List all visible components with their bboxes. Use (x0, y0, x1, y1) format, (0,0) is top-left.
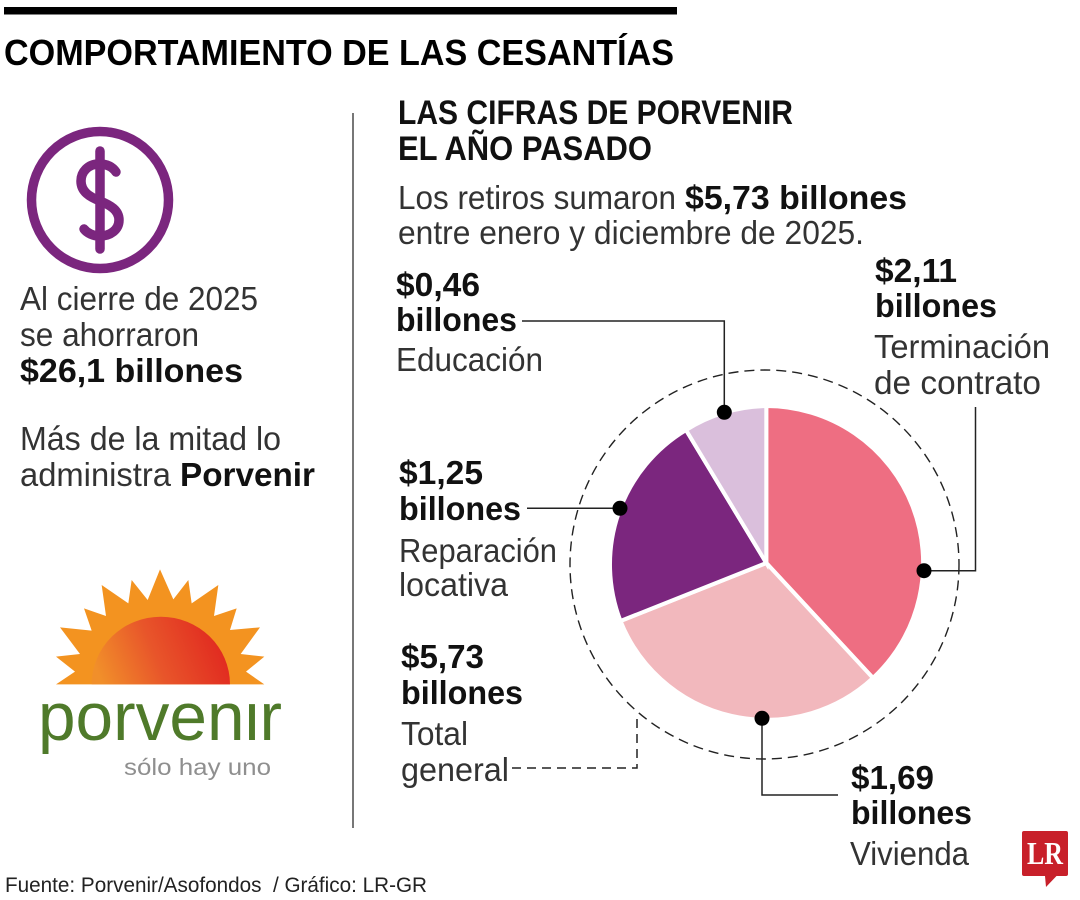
callout: Reparación locativa: locativa (399, 566, 509, 603)
callout: Terminación de contrato (874, 252, 1050, 578)
administrator text (20, 420, 315, 493)
top rule (4, 7, 677, 14)
callout: Educación (396, 266, 732, 420)
callout: Total general: billones (401, 674, 523, 711)
savings text: Al cierre de 2025 (20, 280, 258, 317)
savings text: se ahorraron (20, 316, 199, 353)
title: COMPORTAMIENTO DE LAS CESANTÍAS (4, 32, 674, 73)
savings text: $26,1 billones (20, 352, 243, 389)
callout: Reparación locativa: billones (399, 490, 521, 527)
panel: left savings summary (20, 132, 315, 780)
icon: Porvenir logo: porvenir (38, 679, 282, 755)
pie chart (570, 370, 959, 759)
intro text: Los retiros sumaron (398, 179, 676, 216)
icon: Porvenir logo (38, 569, 282, 780)
slice: Terminación de contrato (766, 406, 923, 678)
icon: Porvenir logo: sólo hay uno (124, 754, 271, 780)
slice: Vivienda (620, 563, 873, 720)
callout: Vivienda: Vivienda (850, 835, 970, 872)
icon: dollar in circle (32, 132, 168, 268)
callout: Vivienda (754, 711, 972, 872)
callout: Educación: billones (396, 301, 517, 338)
savings text (20, 280, 258, 389)
divider (352, 113, 354, 828)
callout: Terminación de contrato: de contrato (874, 364, 1041, 401)
callout: Reparación locativa: Reparación (399, 532, 557, 569)
callout: Vivienda: billones (851, 794, 972, 831)
heading: Porvenir figures: LAS CIFRAS DE PORVENIR (398, 94, 793, 132)
callout: Educación: Educación (396, 341, 543, 378)
intro text (398, 179, 907, 251)
callout: Terminación de contrato: Terminación (874, 328, 1050, 365)
dashed outer ring (570, 370, 959, 759)
callout: Terminación de contrato: $2,11 (875, 252, 957, 289)
administrator text: Más de la mitad lo (20, 420, 281, 457)
callout: Reparación locativa (399, 454, 628, 603)
callout: Terminación de contrato: billones (875, 287, 997, 324)
intro text: entre enero y diciembre de 2025. (398, 214, 864, 251)
heading: Porvenir figures: EL AÑO PASADO (398, 130, 652, 168)
callout: Reparación locativa: $1,25 (399, 454, 483, 491)
administrator text: administra (20, 456, 172, 493)
icon: LR logo: LR (1027, 835, 1064, 871)
callout: Total general (401, 638, 637, 788)
source note: Fuente: Porvenir/Asofondos / Gráfico: LR-GR (5, 874, 427, 897)
slice: Reparación locativa (610, 430, 766, 621)
callout: Vivienda: $1,69 (851, 759, 934, 796)
intro text: $5,73 billones (685, 179, 907, 216)
slice: Educación (686, 406, 766, 563)
icon: LR logo (1022, 831, 1068, 887)
callout: Total general: $5,73 (401, 638, 484, 675)
heading: Porvenir figures (398, 94, 793, 168)
callout: Total general: Total (401, 715, 468, 752)
callout: Educación: $0,46 (396, 266, 480, 303)
administrator text: Porvenir (180, 456, 315, 493)
callout: Total general: general (401, 751, 509, 788)
